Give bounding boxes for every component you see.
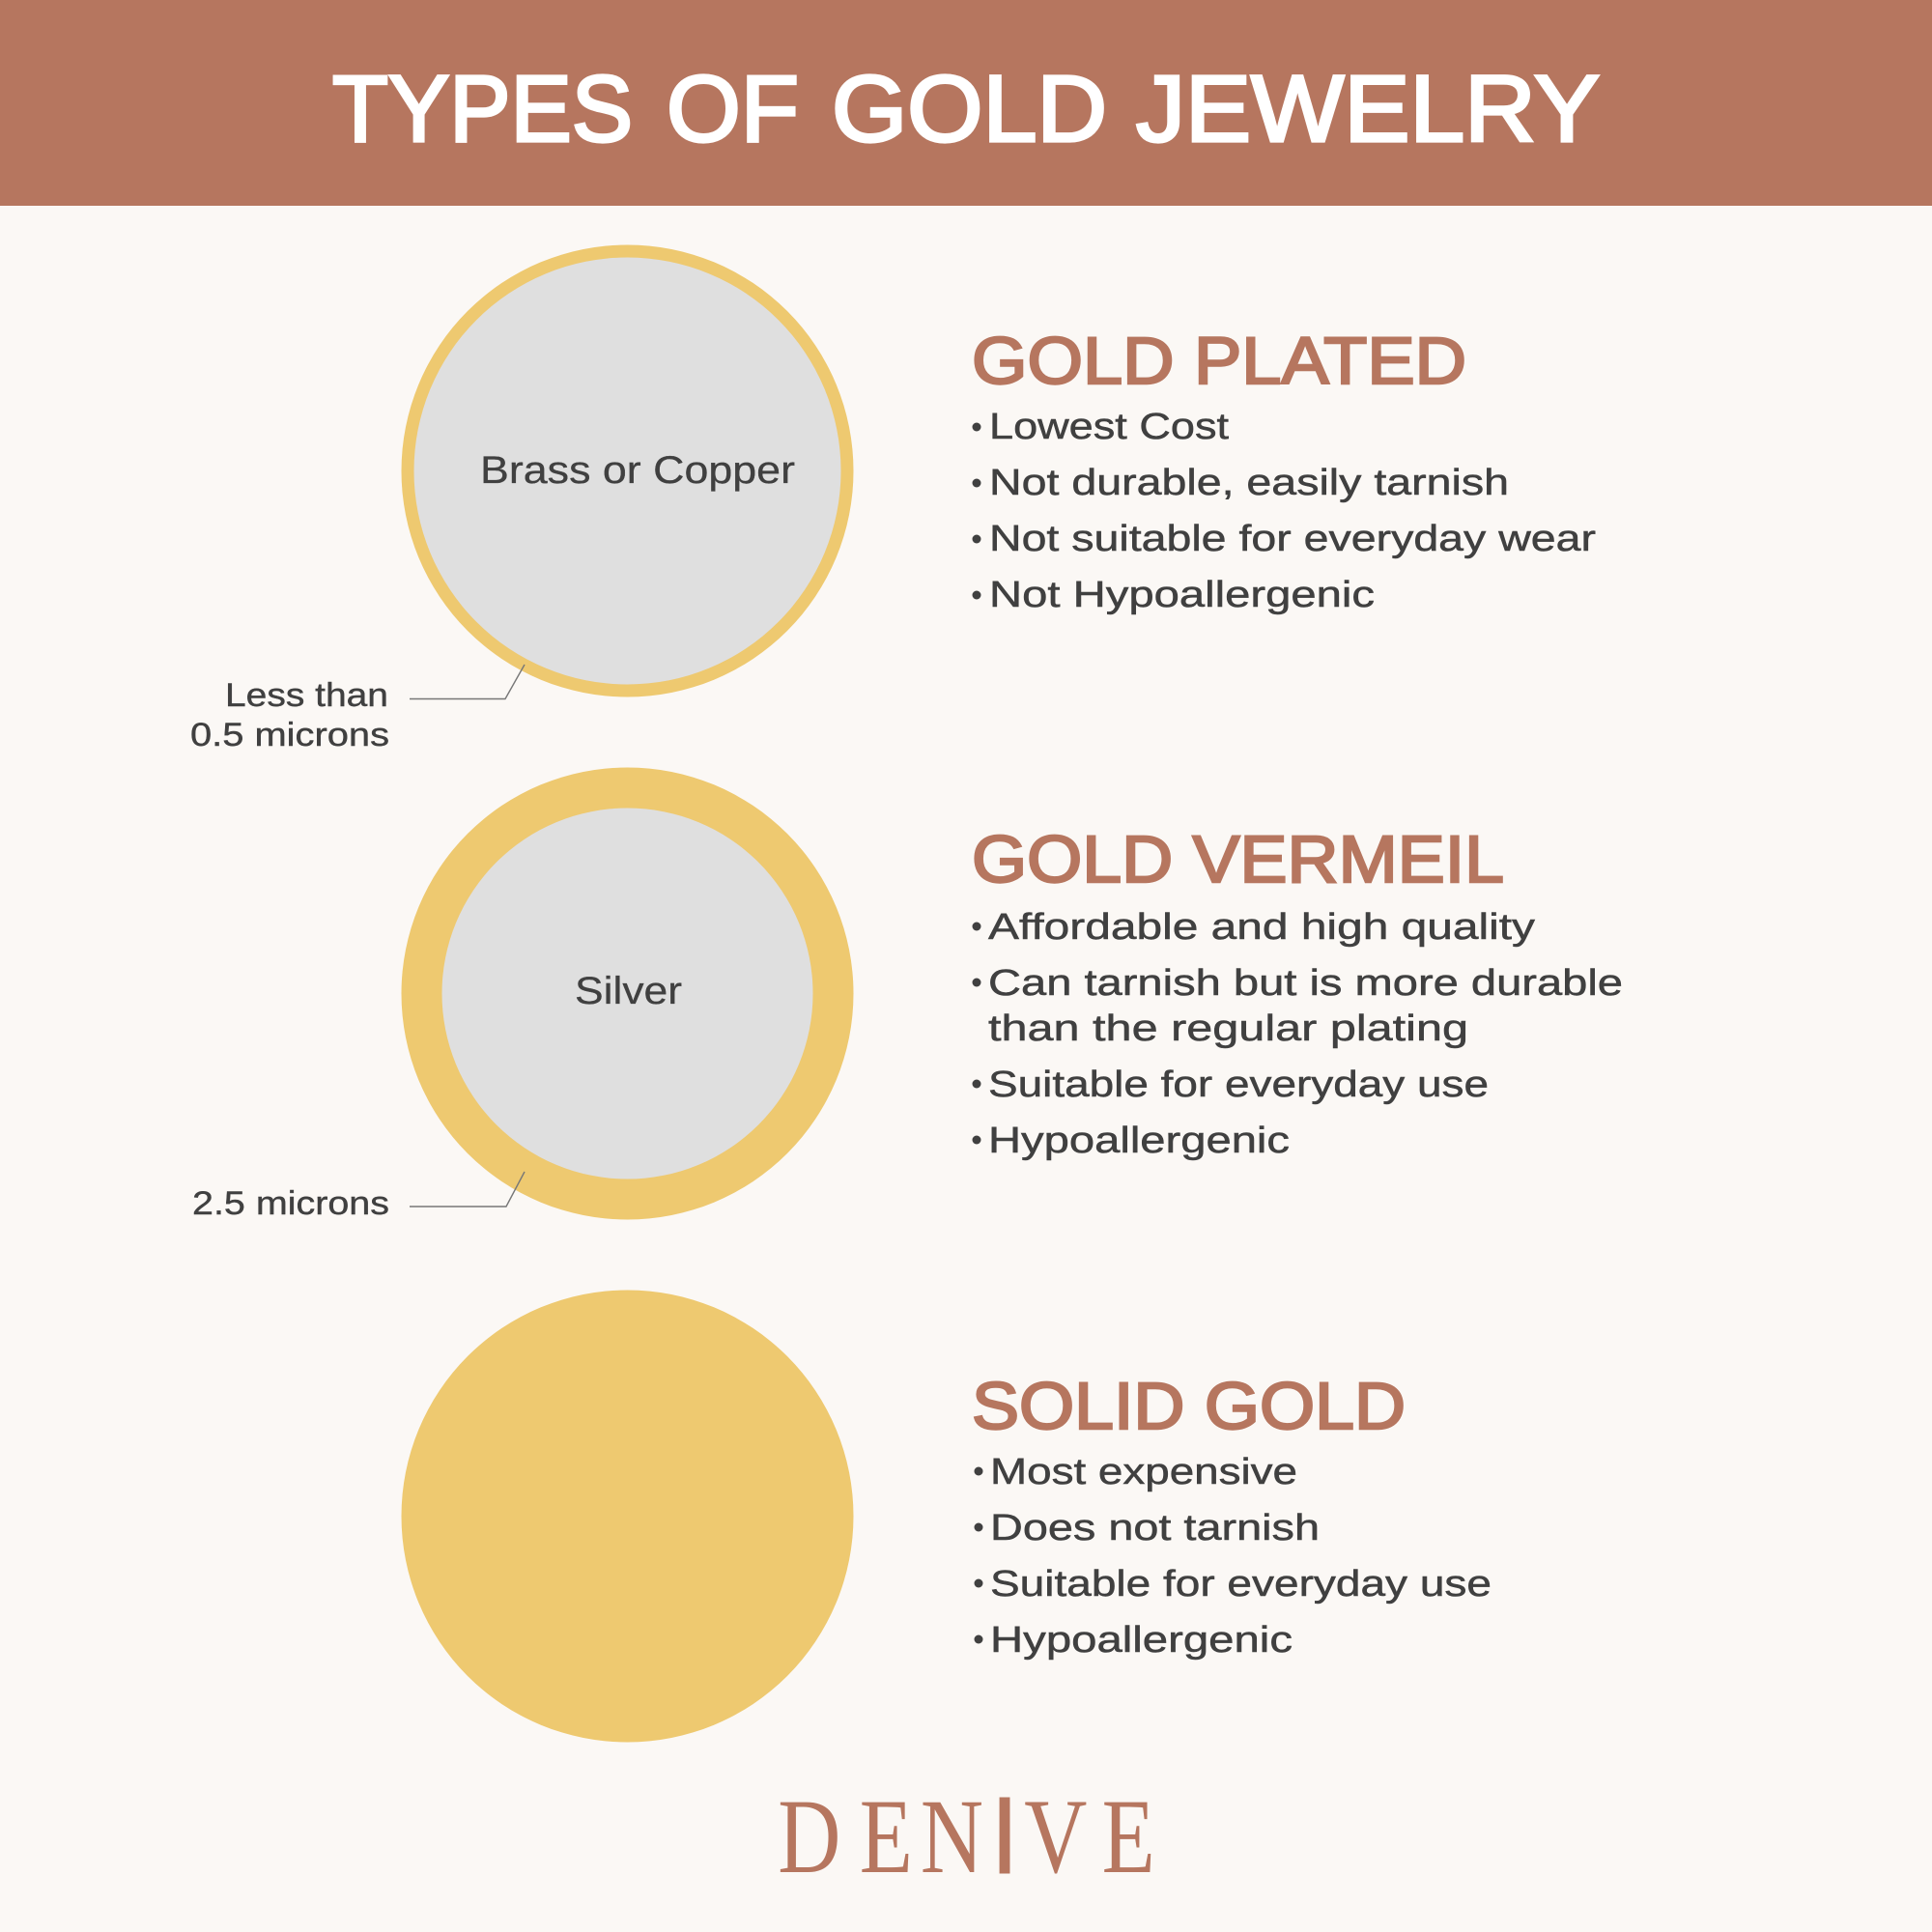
title: OF (667, 56, 799, 161)
list: solid gold properties: Most expensive (990, 1452, 1297, 1492)
list: gold vermeil properties: Suitable for everyday use (988, 1065, 1489, 1105)
heading: gold vermeil: GOLD VERMEIL (972, 822, 1504, 896)
list: gold vermeil properties: Affordable and high quality (988, 907, 1535, 948)
diagram: gold vermeil cross-section (402, 767, 854, 1219)
brand logo: DENIVE: V (1024, 1777, 1087, 1895)
panel: gold plated (190, 245, 1596, 753)
header banner (0, 0, 1932, 206)
list: gold plated properties (972, 407, 1596, 615)
list: gold plated properties: Lowest Cost (989, 407, 1230, 447)
panel: solid gold (402, 1291, 1492, 1743)
callout: less than 0.5 microns (190, 665, 525, 753)
list: solid gold properties (974, 1452, 1492, 1661)
list: gold plated properties: Not suitable for everyday wear (989, 519, 1596, 559)
callout: less than 0.5 microns: 0.5 microns (190, 717, 389, 753)
callout: 2.5 microns (192, 1172, 525, 1222)
callout: 2.5 microns: 2.5 microns (192, 1185, 389, 1222)
list: gold vermeil properties (972, 907, 1623, 1161)
brand logo: DENIVE: D (778, 1777, 840, 1895)
diagram: solid gold cross-section (402, 1291, 854, 1743)
title: TYPES (332, 56, 633, 161)
brand logo: DENIVE: E (1102, 1777, 1155, 1895)
callout: less than 0.5 microns: Less than (225, 677, 388, 714)
brand logo: DENIVE: E (860, 1777, 913, 1895)
list: gold vermeil properties: Hypoallergenic (988, 1121, 1290, 1161)
list: solid gold properties: Suitable for everyday use (990, 1564, 1492, 1605)
diagram: gold plated cross-section (402, 245, 854, 697)
list: solid gold properties: Hypoallergenic (990, 1620, 1293, 1661)
list: gold plated properties: Not durable, easily tarnish (989, 463, 1509, 503)
brand logo: DENIVE: I (992, 1777, 1017, 1895)
list: solid gold properties: Does not tarnish (990, 1508, 1320, 1548)
list: gold vermeil properties: than the regular plating (988, 1009, 1468, 1049)
list: gold vermeil properties: Can tarnish but is more durable (988, 963, 1623, 1004)
diagram: gold vermeil cross-section: Silver (575, 970, 682, 1012)
list: gold plated properties: Not Hypoallergenic (989, 575, 1375, 615)
diagram: gold plated cross-section: Brass or Copper (480, 449, 795, 492)
title: GOLD (832, 56, 1107, 161)
brand logo: DENIVE: N (921, 1777, 983, 1895)
panel: gold vermeil (192, 767, 1623, 1222)
heading: solid gold: SOLID GOLD (972, 1369, 1406, 1443)
title: JEWELRY (1136, 56, 1600, 161)
heading: gold plated: GOLD PLATED (972, 324, 1466, 398)
